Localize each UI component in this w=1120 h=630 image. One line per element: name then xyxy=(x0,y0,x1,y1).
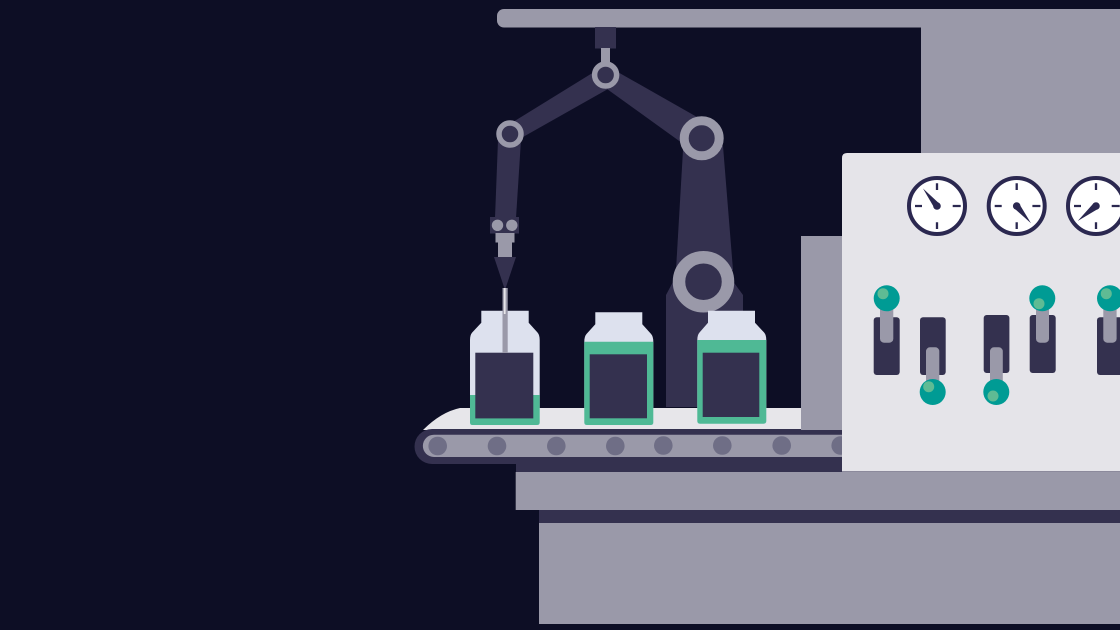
lower dark band xyxy=(539,510,1120,523)
belt top surface xyxy=(423,408,802,430)
belt frame xyxy=(414,429,850,464)
control panel xyxy=(842,153,1120,472)
left joint xyxy=(499,123,521,145)
belt track xyxy=(423,435,850,457)
lever 2: down xyxy=(920,317,946,405)
top joint xyxy=(595,64,617,86)
overhead rail xyxy=(497,9,1120,28)
right forearm xyxy=(676,146,733,270)
machine block: upper right housing xyxy=(921,9,1120,155)
rollers xyxy=(428,436,850,455)
gauge 3 xyxy=(1068,178,1120,234)
base joint xyxy=(679,257,728,306)
left forearm xyxy=(495,140,521,218)
machine side block xyxy=(801,236,843,430)
lower base block xyxy=(539,523,1120,624)
conveyor xyxy=(414,408,850,464)
gauge 1 xyxy=(909,178,965,234)
robot arm xyxy=(490,27,743,407)
lever 3: down xyxy=(983,315,1009,405)
left upper arm xyxy=(513,72,608,137)
right upper arm xyxy=(607,71,697,143)
upper base plate xyxy=(516,472,1120,510)
machine base xyxy=(516,457,1120,624)
filling needle xyxy=(502,288,508,353)
bottle 2: filled xyxy=(584,312,653,425)
filling head xyxy=(490,217,519,290)
arm mount xyxy=(595,27,616,66)
gauge 2 xyxy=(989,178,1045,234)
bottle 3: filled xyxy=(697,311,766,424)
lever 4: up xyxy=(1029,285,1056,373)
arm base xyxy=(666,280,743,407)
lever 1: up xyxy=(874,285,900,375)
bottle 1: nearly empty xyxy=(470,311,540,425)
right joint xyxy=(684,121,719,156)
lever 5: up xyxy=(1097,285,1120,375)
upper dark band xyxy=(516,457,1120,472)
